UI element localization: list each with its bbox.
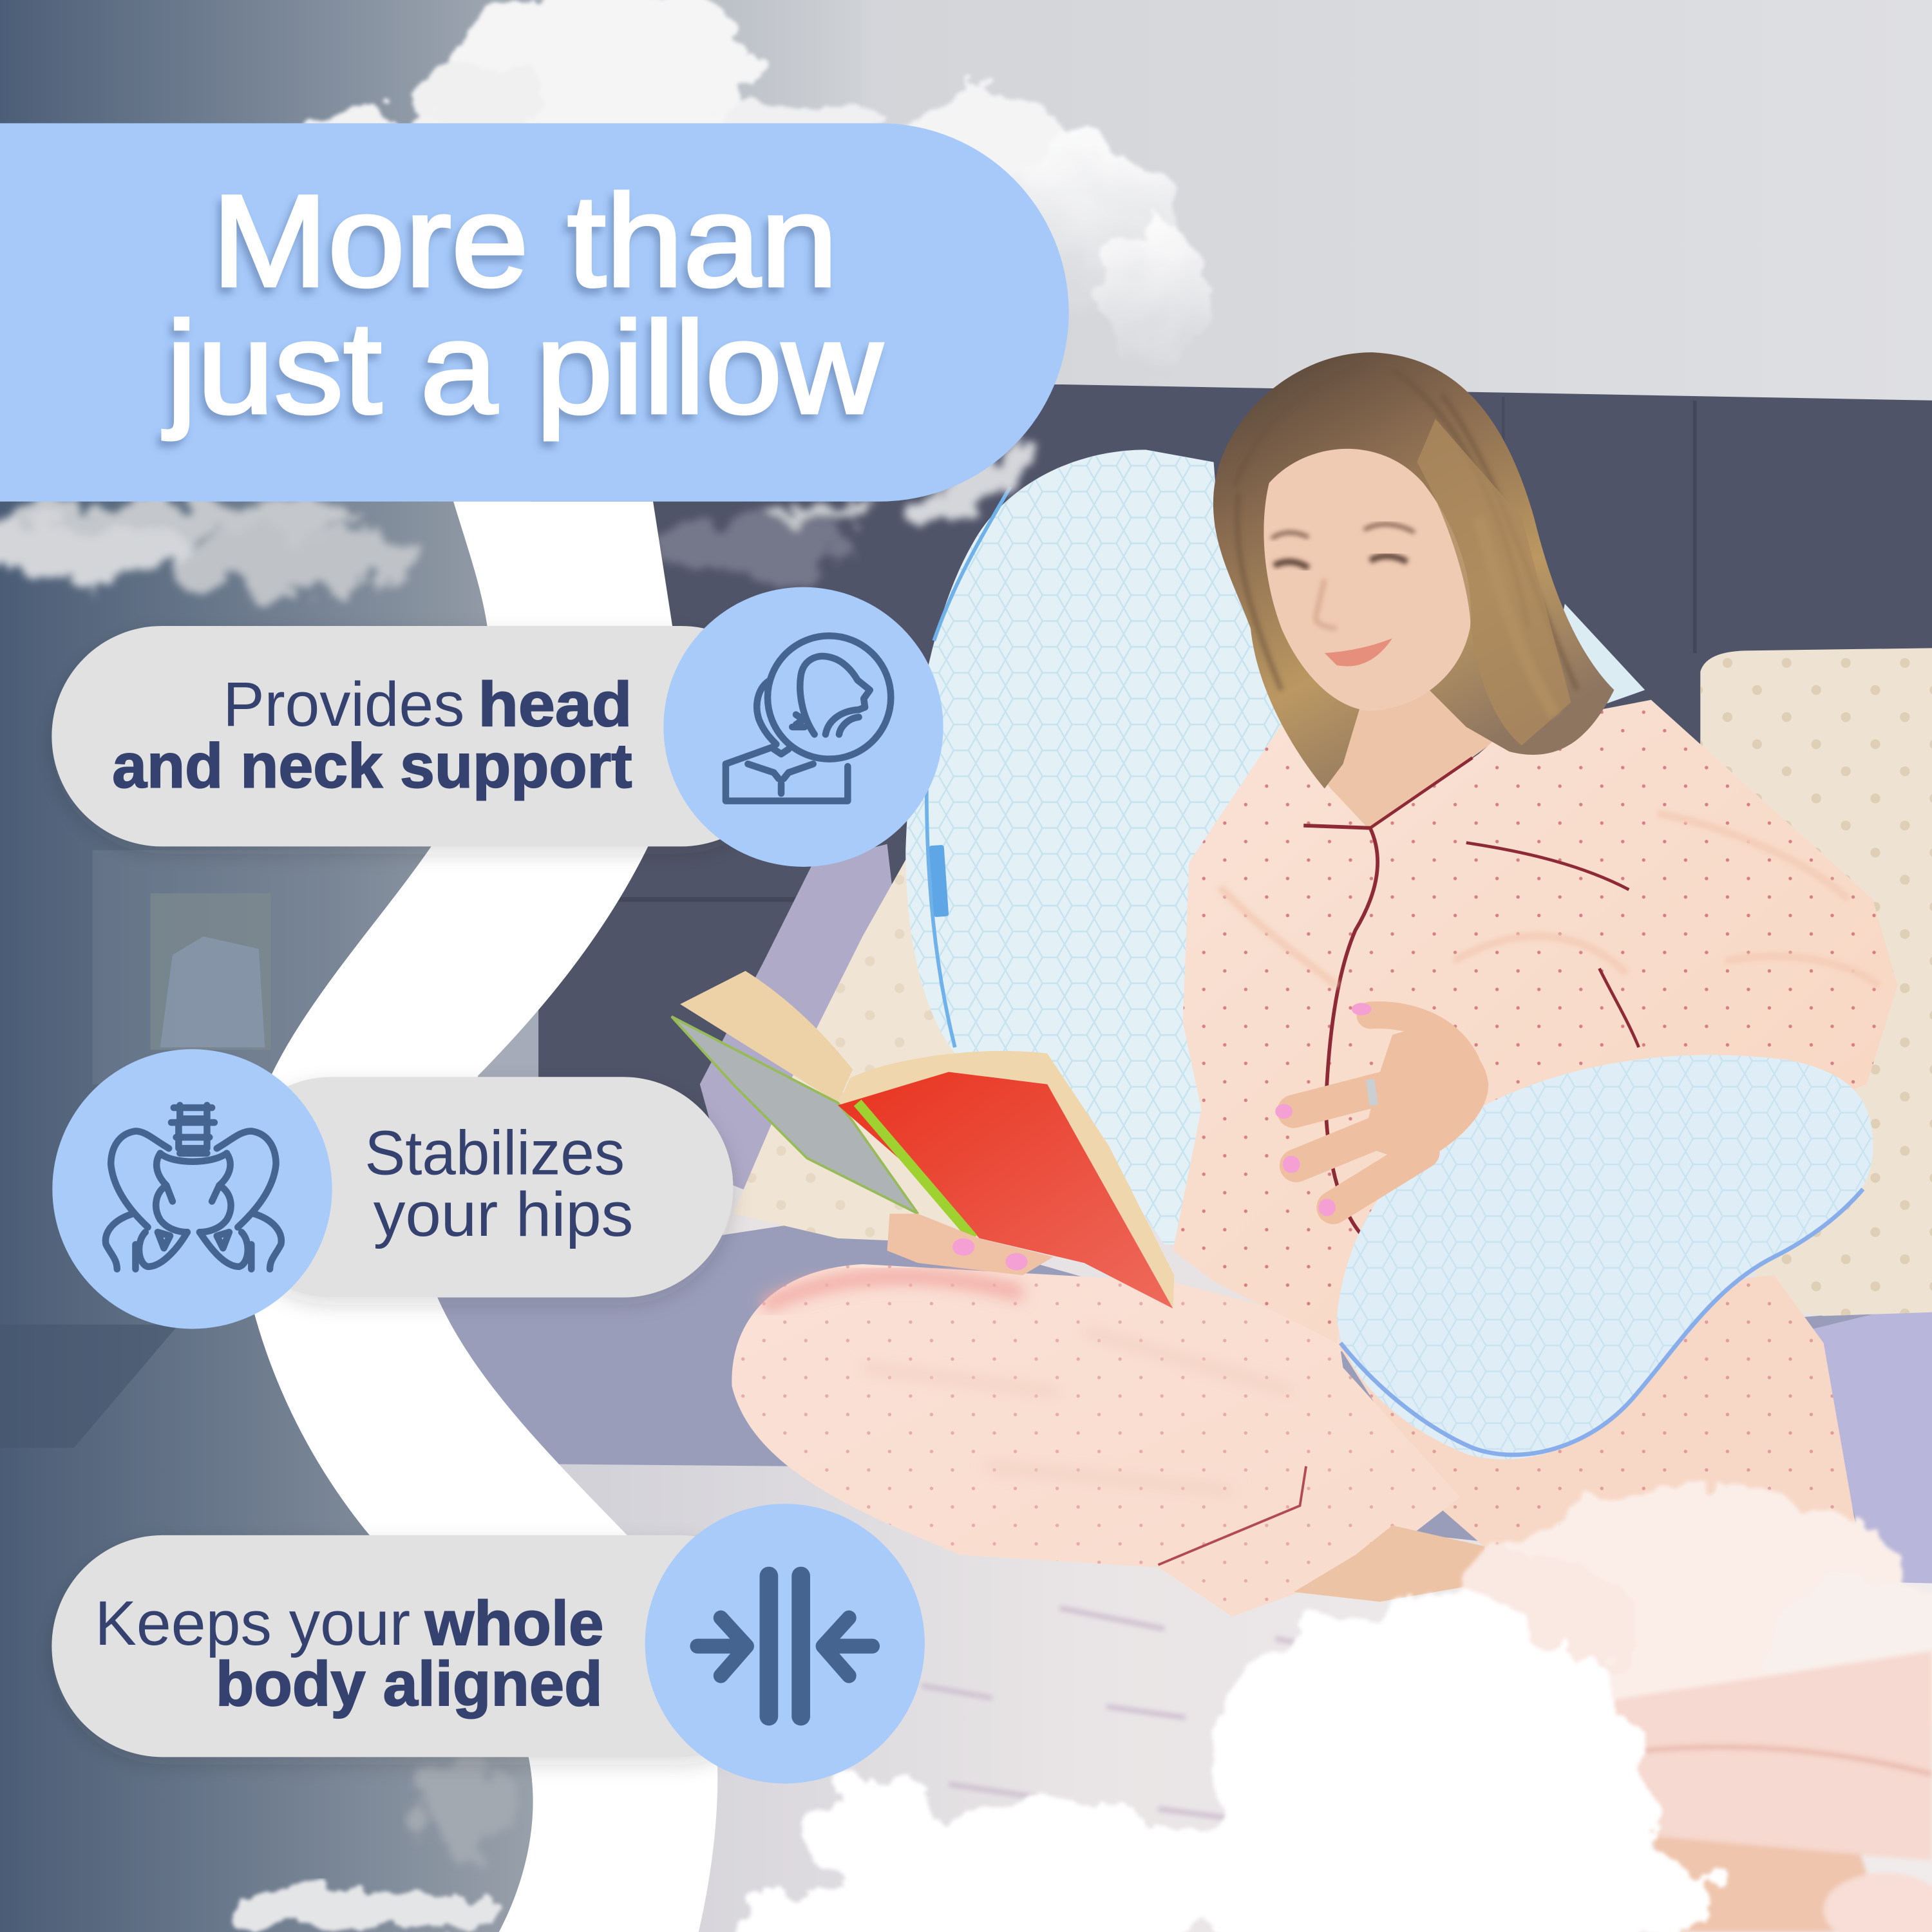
label: stabilizes your hips: your hips bbox=[374, 1179, 633, 1249]
header banner bbox=[0, 123, 1069, 502]
left slate panel bbox=[0, 493, 533, 1932]
label: head and neck support: Provides bbox=[223, 669, 464, 739]
label: keeps your whole body aligned: Keeps your bbox=[95, 1588, 410, 1658]
hand holding book bbox=[887, 1214, 1054, 1275]
cream cushion right bbox=[1700, 648, 1932, 1316]
woman: bare foot bbox=[1294, 1526, 1484, 1602]
label: head and neck support: and neck support bbox=[112, 731, 632, 801]
label: keeps your whole body aligned: whole bbox=[424, 1588, 603, 1658]
icon: alignment arrows bbox=[697, 1576, 873, 1716]
clouds: top bbox=[296, 0, 1199, 370]
body pillow: upper section bbox=[905, 450, 1645, 1244]
woman: hair back bbox=[1213, 352, 1614, 788]
label: stabilizes your hips: Stabilizes bbox=[365, 1117, 625, 1188]
clouds: bottom right bbox=[739, 1484, 1932, 1932]
headboard bbox=[530, 384, 1932, 1183]
label: keeps your whole body aligned: body aligned bbox=[216, 1649, 603, 1719]
wall fragment beside headboard bbox=[468, 986, 538, 1084]
woman: trousers bbox=[732, 1264, 1868, 1616]
cream cushion left bbox=[733, 838, 986, 1244]
open book bbox=[672, 971, 1174, 1309]
feature pill 2: stabilizes your hips bbox=[52, 1049, 733, 1329]
body pillow: lower arm bbox=[1337, 1055, 1873, 1459]
background: bedroom wall bbox=[0, 0, 1932, 518]
icon: pelvis and spine bbox=[106, 1105, 281, 1269]
white wave ribbon bbox=[240, 502, 717, 1932]
bed sheet: white duvet bbox=[518, 1464, 1932, 1932]
title: More than bbox=[212, 167, 838, 314]
woman: pajama top bbox=[1173, 700, 1897, 1343]
sheet highlight right bbox=[1805, 1300, 1932, 1584]
title bbox=[163, 167, 882, 440]
woman: neck and chest bbox=[1306, 677, 1497, 831]
bed sheet: lavender bbox=[419, 1214, 1932, 1589]
lavender cushion bbox=[700, 844, 918, 1208]
woman: hair right strands bbox=[1417, 419, 1571, 746]
woman: hand on belly bbox=[1275, 1003, 1488, 1216]
woman: face bbox=[1264, 449, 1471, 711]
clouds: wisp over headboard bbox=[659, 433, 1039, 580]
feature pill 1: head and neck support bbox=[52, 587, 943, 867]
label: keeps your whole body aligned bbox=[95, 1588, 603, 1719]
label: head and neck support: head bbox=[478, 669, 632, 739]
label: head and neck support bbox=[112, 669, 632, 801]
label: stabilizes your hips bbox=[365, 1117, 633, 1249]
top-left sky bbox=[0, 0, 862, 135]
duvet fold lines bbox=[922, 1608, 1343, 1824]
icon: head and neck bbox=[726, 636, 891, 801]
feature pill 3: keeps whole body aligned bbox=[52, 1504, 925, 1783]
title: just a pillow bbox=[163, 294, 882, 440]
